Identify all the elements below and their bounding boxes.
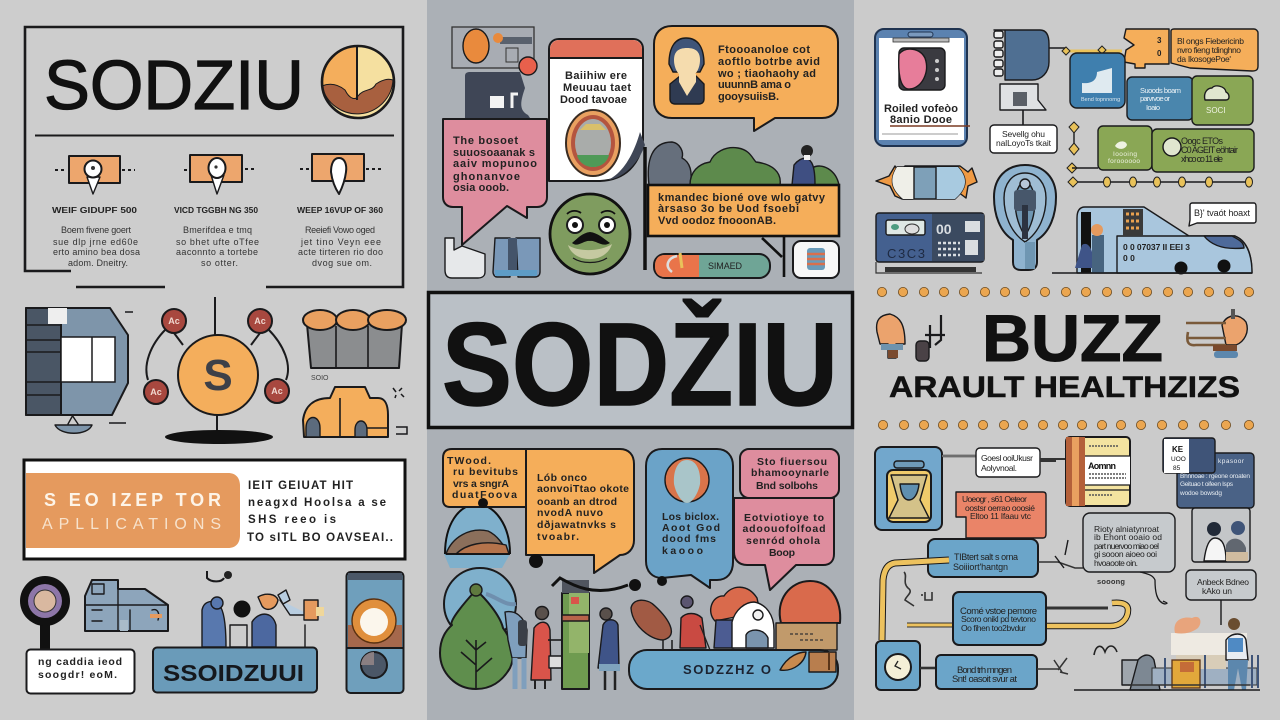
callout: white note xyxy=(26,650,134,694)
illustration: train xyxy=(1052,207,1252,274)
callout: grey note: hvoaoote oin. xyxy=(1094,558,1138,568)
panel: blue flow box three: Bond trh mngen xyxy=(957,665,1012,676)
label: VICD TGGBH NG 350 xyxy=(174,206,259,215)
card: green small: Ioooing xyxy=(1113,151,1137,158)
illustration: two people panel xyxy=(1192,508,1250,562)
icon: round cross-section xyxy=(322,46,394,118)
card: dark slate with small card: 85 xyxy=(1173,465,1181,472)
callout: white note: ng caddia ieod xyxy=(38,656,122,668)
panel: blue flow box two: Comé vstoe pemore xyxy=(960,606,1037,617)
label: WEIF GIDUPF 500 xyxy=(52,206,138,215)
illustration: machine xyxy=(85,580,168,631)
callout: small orange box xyxy=(443,449,526,508)
icon: green smiling face xyxy=(550,194,630,274)
callout: pink speech lower: Boop xyxy=(769,547,795,559)
callout: orange tag xyxy=(1124,29,1258,71)
callout: pink speech: The bosoet xyxy=(453,135,518,147)
chart: hub with four nodes: Ac xyxy=(168,316,180,326)
badge: SODZZHZ O pill: SODZZHZ O xyxy=(683,662,771,677)
speech text: uuunnB ama o xyxy=(718,79,791,91)
card: blue clock xyxy=(876,641,936,690)
illustration: trees and people xyxy=(631,581,840,650)
document text: Meuuau taet xyxy=(563,82,631,94)
panel: blue flow box two: Oo fihen too2bvdur xyxy=(961,623,1026,633)
callout: pink box upper: Sto fiuersou xyxy=(757,456,827,468)
paragraph xyxy=(176,225,259,268)
decorative row: top dots xyxy=(877,287,1254,297)
callout: orange tag: Bl ongs Fiebericinb xyxy=(1177,36,1244,46)
chart: hub with four nodes: Ac xyxy=(150,387,162,397)
card: coral text: Eltoo 11 Ifaau vtc xyxy=(970,511,1032,521)
illustration: train: 0 0 xyxy=(1123,253,1135,263)
illustration: people by the cabinet xyxy=(486,576,667,690)
illustration: stacked book xyxy=(1066,437,1130,506)
card: green wide xyxy=(1152,129,1254,172)
callout: white note: nalLoyoTs tkait xyxy=(996,138,1052,148)
callout: blue speech with face: dood fms xyxy=(662,533,716,545)
panel: SODZIU header frame xyxy=(25,27,403,287)
card: green wide: xhco co 11 ele xyxy=(1181,154,1223,164)
illustration: console xyxy=(876,213,984,273)
paragraph: sue dlp jrne ed60e xyxy=(53,237,138,247)
panel: centre column xyxy=(428,26,852,690)
callout: blue speech with face: Los biclox. xyxy=(662,511,719,523)
callout: grey note: Rioty alniatynroat xyxy=(1094,524,1160,534)
callout: grey note: gi sooon aioeo ooi xyxy=(1094,549,1157,559)
callout: large orange speech: nvodA nuvo xyxy=(537,507,603,519)
callout: white note: Sevellg ohu xyxy=(1002,129,1045,139)
callout: pink speech: aaiv mopunoo xyxy=(453,158,537,170)
button: pill: SIMAED xyxy=(708,261,742,271)
panel: tablet with camera xyxy=(875,29,970,146)
paragraph: dvog sue om. xyxy=(312,258,372,268)
chart: hub with four nodes xyxy=(144,297,289,444)
paragraph xyxy=(298,225,383,268)
callout: blue speech with face xyxy=(646,449,733,588)
illustration: console: C3C3 xyxy=(887,246,925,261)
callout: white note xyxy=(990,125,1057,153)
callout: grey note lower: kAko un xyxy=(1202,586,1232,596)
callout: white adoption box: Goesl ooiUkusr xyxy=(981,453,1033,463)
callout: grey note lower xyxy=(1186,570,1256,625)
label: WEEP 16VUP OF 360 xyxy=(297,206,384,215)
illustration: capsule xyxy=(876,166,977,199)
icon: magnifier xyxy=(20,576,70,651)
callout: pink speech: suuosoaanak s xyxy=(453,147,535,159)
item: column two xyxy=(174,155,259,268)
callout: pink speech lower: senród ohola xyxy=(746,535,820,547)
illustration: stacked book: Aomnn xyxy=(1088,461,1116,471)
callout: blue speech with face: kaooo xyxy=(662,545,703,557)
illustration: three buckets xyxy=(303,310,406,382)
paragraph: adom. Dneitry. xyxy=(68,258,128,268)
card: green wide: Oogc ETOs xyxy=(1181,136,1224,146)
paragraph: erto amino bea dosa xyxy=(53,247,140,257)
chart: hub with four nodes: Ac xyxy=(271,386,283,396)
paragraph: jet tino Veyn eee xyxy=(300,237,381,247)
callout: large orange speech: dðjawatnvks s xyxy=(537,519,616,531)
badge: SSOIDZUUI xyxy=(153,648,317,692)
item: column one xyxy=(52,156,140,268)
icon: teardrop on orange card xyxy=(300,154,381,194)
card: dark slate with small card: UOO xyxy=(1171,456,1186,463)
callout: large orange speech xyxy=(526,449,634,573)
icon: camera xyxy=(899,48,945,90)
callout: grey note xyxy=(1083,513,1175,604)
callout: grey note: sooong xyxy=(1097,577,1125,586)
callout: orange text strip: àrsaso 3o be Uod fsoebi xyxy=(658,203,799,215)
panel: blue flow box two xyxy=(907,592,1128,645)
decorative row: bottom dots xyxy=(878,420,1254,430)
background: right column xyxy=(854,0,1280,720)
card: coral text: Uoeogr , s61 Oeteor xyxy=(962,494,1027,504)
heading: BUZZ: BUZZ xyxy=(982,301,1163,375)
subheading: ARAULT HEALTHZIZS xyxy=(889,371,1240,404)
panel: blue flow box three xyxy=(936,655,1068,689)
paragraph: Boem fivene goert xyxy=(61,225,131,235)
panel: applications banner xyxy=(24,460,405,559)
banner text: IEIT GEIUAT HIT xyxy=(248,480,353,492)
card: coral text xyxy=(956,492,1046,538)
callout: orange tag: 3 xyxy=(1157,36,1162,45)
illustration: green tree in circle xyxy=(440,568,516,689)
callout: pink speech lower xyxy=(734,498,834,590)
illustration: console: 00 xyxy=(936,221,952,237)
card: blue text: Suoods boam xyxy=(1140,86,1181,95)
callout: white note: soogdr! eoM. xyxy=(38,669,117,681)
banner subheading: APLLICATIONS xyxy=(42,516,221,533)
card: blue with wave icon xyxy=(1070,53,1125,108)
callout: pink speech xyxy=(443,119,547,245)
paragraph: acte tirteren rio doo xyxy=(298,247,383,257)
callout: grey note: part nuervoo miao oel xyxy=(1094,541,1159,551)
callout: large orange speech: Lób onco xyxy=(537,472,587,484)
callout: pink speech: ghonanvoe xyxy=(453,171,520,183)
panel: document with medal xyxy=(549,39,645,181)
illustration: orange car xyxy=(303,387,407,437)
heading: SODŽIU: SODŽIU xyxy=(442,298,838,431)
badge: SODZZHZ O pill xyxy=(629,650,838,689)
illustration: glove and cylinders xyxy=(445,238,540,278)
icon: medal xyxy=(566,110,620,176)
background: centre column xyxy=(427,0,854,720)
paragraph: Bmerifdea e tmq xyxy=(183,225,252,235)
heading: SODZIU: SODZIU xyxy=(44,46,304,124)
banner text: SHS reeo is xyxy=(248,514,336,526)
card: green with cloud icon: SOCI xyxy=(1206,106,1226,115)
callout: small orange box: TWood. xyxy=(447,455,491,467)
callout: pink box upper xyxy=(740,449,839,498)
pipe: yellow tube xyxy=(882,560,949,640)
panel: left column xyxy=(20,27,407,694)
icon: round face xyxy=(665,458,709,503)
callout: white adoption box xyxy=(942,448,1066,477)
tablet text xyxy=(884,103,958,126)
icon: pin on orange card xyxy=(55,156,135,194)
panel: main title frame xyxy=(428,292,852,431)
card: green with cloud icon xyxy=(1192,76,1253,125)
card: dark slate with small card: Geituao t oifeen Isps xyxy=(1180,481,1234,488)
speech text xyxy=(717,44,820,103)
callout: train speech xyxy=(1189,203,1256,226)
callout: small orange box: duatFoova xyxy=(452,489,517,501)
illustration: microphone bulb xyxy=(994,165,1056,270)
banner text: neagxd Hoolsa a se xyxy=(248,497,386,509)
card: dark slate with small card: KE xyxy=(1172,445,1184,454)
callout: white adoption box: Aolyvnoal. xyxy=(981,463,1017,473)
background: left column xyxy=(0,0,427,720)
banner text: TO sITL BO OAVSEAI.. xyxy=(247,532,393,544)
callout: large orange speech: tvoabr. xyxy=(537,531,579,543)
panel: blue flow box two: Scoro onikl pd tevtono xyxy=(961,614,1036,624)
card: dark slate with small card: wodoe bowsdg xyxy=(1179,490,1222,497)
panel: right column xyxy=(875,29,1260,690)
panel: blue flow box three: Snt! oasoit svur at xyxy=(952,674,1017,685)
panel: blue flow box: Soiiiort'hantgn xyxy=(953,562,1008,572)
callout: orange tag: 0 xyxy=(1157,49,1162,58)
callout: small orange box: ru bevitubs xyxy=(453,466,518,478)
callout: grey note: ib Ehont ooaio od xyxy=(1094,532,1162,542)
callout: train speech: B}' tvaót hoaxt xyxy=(1194,208,1250,218)
card: green small: foroooooo xyxy=(1108,158,1140,165)
network: connector line with nodes xyxy=(1062,46,1252,187)
panel: blue flow box xyxy=(928,539,1083,577)
illustration: team of people xyxy=(202,571,324,648)
icon: portrait xyxy=(669,38,704,104)
callout: large orange speech: ooanb an dtrod xyxy=(537,496,617,508)
paragraph: so bhet ufte oTfee xyxy=(176,237,259,247)
card: coral text: oostsr oerrao ooosié xyxy=(965,503,1035,513)
banner text xyxy=(247,480,393,544)
callout: blue speech with face: Aoot God xyxy=(662,522,720,534)
callout: large orange speech: aonvoiTtao okote xyxy=(537,483,629,495)
callout: orange tag: nvro fieng tdinghno xyxy=(1177,45,1241,55)
speech text: aoftlo botrbe avid xyxy=(718,56,820,68)
callout: orange text strip: kmandec bioné ove wlo gatvy xyxy=(658,192,826,204)
document text: Dood tavoae xyxy=(560,94,627,106)
paragraph: so otter. xyxy=(201,258,238,268)
hub letter: S xyxy=(203,351,233,400)
speech text: Ftoooanoloe cot xyxy=(718,44,810,56)
card: blue text: parvrvoe or xyxy=(1140,94,1170,103)
speech text: wo ; tiaohaohy ad xyxy=(717,68,816,80)
card: blue with wave icon: Bend topnnorng xyxy=(1081,97,1120,103)
callout: pink speech lower: Eotviotioye to xyxy=(744,512,824,524)
icon: pin on orange card xyxy=(184,155,257,194)
paragraph: Reeiefi Vowo oged xyxy=(305,225,375,235)
card: dark slate with small card: Bhnnoae : rgeone oroaten xyxy=(1180,473,1250,480)
card: blue text xyxy=(1127,77,1193,120)
caption: SOIO xyxy=(311,375,329,382)
tablet text: Roiled vofeòo xyxy=(884,103,958,115)
callout: orange tag: da IkosogePoe' xyxy=(1177,54,1231,64)
callout: pink speech: osia ooob. xyxy=(453,182,509,194)
illustration: orange lens machine xyxy=(452,27,537,118)
paragraph xyxy=(53,225,140,268)
document text xyxy=(560,70,631,106)
callout: pink box upper: Bnd solbohs xyxy=(756,480,818,492)
icon: striped tile xyxy=(793,241,839,278)
callout: orange text strip xyxy=(648,185,839,277)
badge: SSOIDZUUI: SSOIDZUUI xyxy=(163,660,304,686)
banner heading: S EO IZEP TOR xyxy=(44,490,221,510)
callout: orange text strip: Vvd oodoz fnooonAB. xyxy=(658,215,776,227)
illustration: phone xyxy=(346,572,404,693)
button: pill xyxy=(654,253,770,278)
document text: Baiihiw ere xyxy=(565,70,627,82)
card: green wide: C0 AGEIT eöhtair xyxy=(1181,145,1238,155)
card: blue text: Ioaio xyxy=(1146,103,1160,112)
speech text: gooysuiisB. xyxy=(718,91,779,103)
figure: left mascot and note xyxy=(877,314,945,361)
callout: orange speech with face xyxy=(654,26,838,131)
chart: hub with four nodes: Ac xyxy=(254,316,266,326)
callout: pink speech lower: adoouofolfoad xyxy=(742,523,826,535)
card: blue with yellow jar xyxy=(875,447,942,530)
tablet text: 8anio Dooe xyxy=(890,114,952,126)
card: dark slate with small card: kpasoor xyxy=(1218,458,1245,465)
callout: grey note lower: Anbeck Bdneo xyxy=(1197,577,1249,587)
illustration: blue-grey device xyxy=(26,308,133,433)
card: green small xyxy=(1098,126,1152,170)
paragraph: aaconnto a tortebe xyxy=(176,247,258,257)
illustration: train: 0 0 07037 II EEI 3 xyxy=(1123,242,1190,252)
figure: right mascot xyxy=(1186,309,1247,358)
illustration: workshop scene xyxy=(1074,617,1260,690)
illustration: server stand xyxy=(994,30,1066,125)
panel: blue flow box: TIBtert salt s orna xyxy=(954,552,1018,562)
item: column three xyxy=(297,154,384,268)
callout: pink box upper: bhamooynarle xyxy=(751,467,829,479)
card: dark slate with small card xyxy=(1163,438,1254,508)
callout: small orange box: vrs a sngrA xyxy=(453,478,509,490)
illustration: rocks in arch xyxy=(444,504,510,568)
illustration: landscape with person xyxy=(645,142,839,270)
